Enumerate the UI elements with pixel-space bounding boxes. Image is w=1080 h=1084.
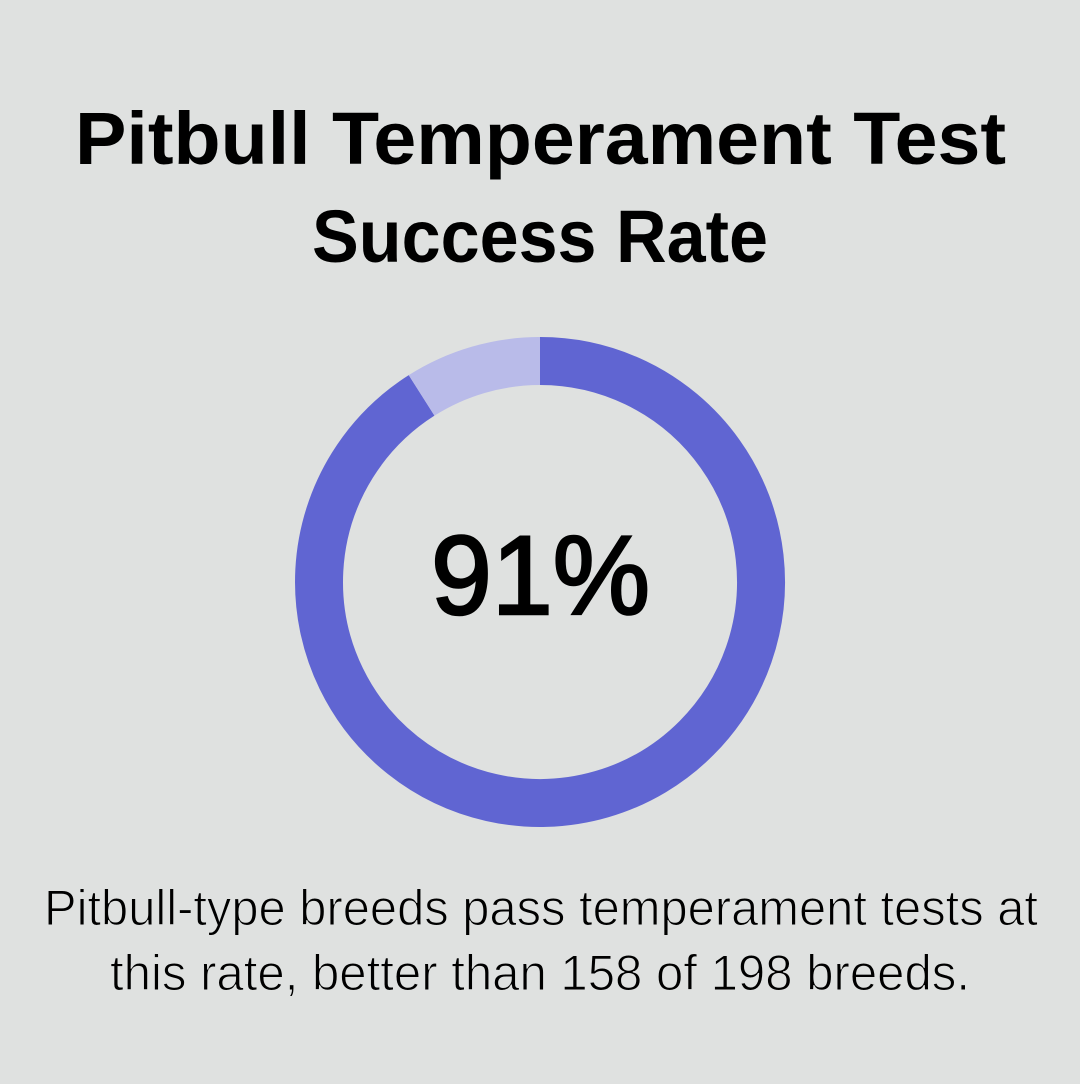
centre value: 91% [431,513,650,638]
description: this rate, better than 158 of 198 breeds. [110,945,970,1001]
description [44,880,1038,1001]
main segment: 91 percent [319,361,761,803]
description: Pitbull-type breeds pass temperament tests at [44,880,1038,936]
title: Pitbull Temperament Test [75,97,1006,180]
title: Success Rate [312,195,768,278]
title [75,97,1006,278]
remainder segment: 9 percent [422,361,540,395]
donut chart: 91% [319,361,761,803]
